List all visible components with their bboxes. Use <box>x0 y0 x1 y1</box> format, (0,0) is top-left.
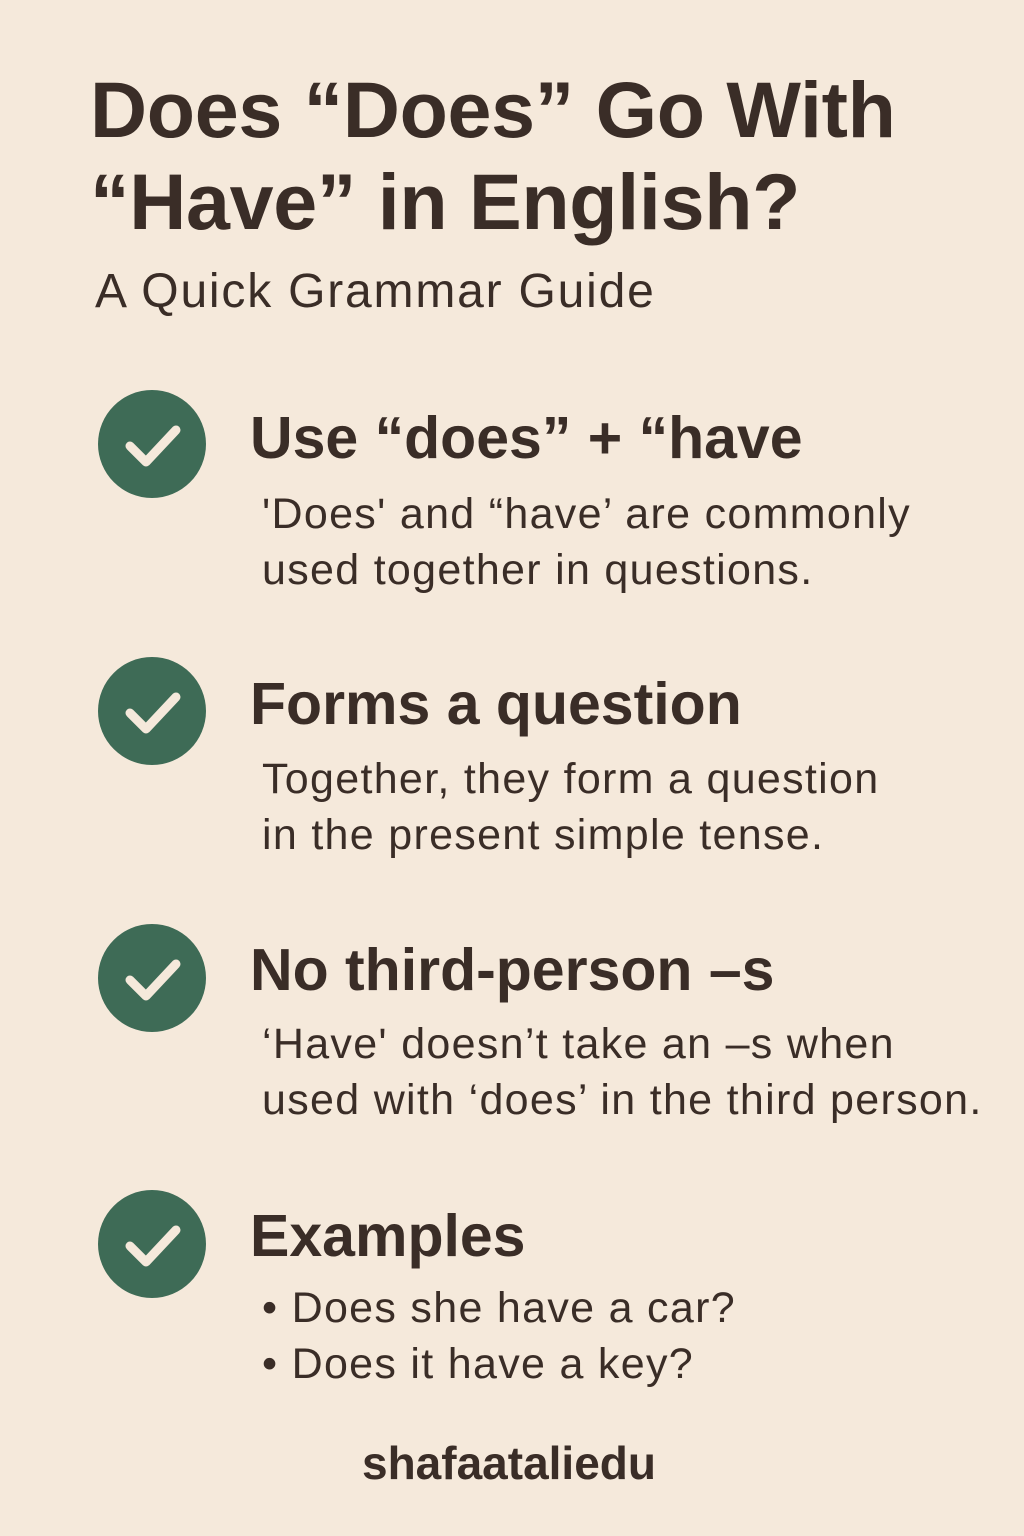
footer: shafaataliedu <box>362 1437 656 1489</box>
text 2: in the present simple tense. <box>262 811 824 859</box>
heading 2: Forms a question <box>250 671 742 737</box>
title <box>90 65 896 246</box>
heading 3: No third-person –s <box>250 937 774 1003</box>
heading 1: Use “does” + “have <box>250 405 803 471</box>
text 3: ‘Have' doesn’t take an –s when <box>262 1020 895 1068</box>
icon: check 2 <box>98 657 206 765</box>
title: “Have” in English? <box>90 157 800 246</box>
title: Does “Does” Go With <box>90 65 896 154</box>
examples list: • Does she have a car? <box>262 1284 736 1332</box>
text 1: 'Does' and “have’ are commonly <box>262 490 911 538</box>
icon: check 3 <box>98 924 206 1032</box>
text 3 <box>262 1020 983 1124</box>
icon: check 1 <box>98 390 206 498</box>
text 2 <box>262 755 879 859</box>
examples list: • Does it have a key? <box>262 1340 694 1388</box>
text 3: used with ‘does’ in the third person. <box>262 1076 983 1124</box>
examples list <box>262 1284 736 1388</box>
subtitle: A Quick Grammar Guide <box>95 265 656 318</box>
text 1: used together in questions. <box>262 546 813 594</box>
text 2: Together, they form a question <box>262 755 879 803</box>
icon: check 4 <box>98 1190 206 1298</box>
text 1 <box>262 490 911 594</box>
heading 4: Examples <box>250 1203 526 1269</box>
